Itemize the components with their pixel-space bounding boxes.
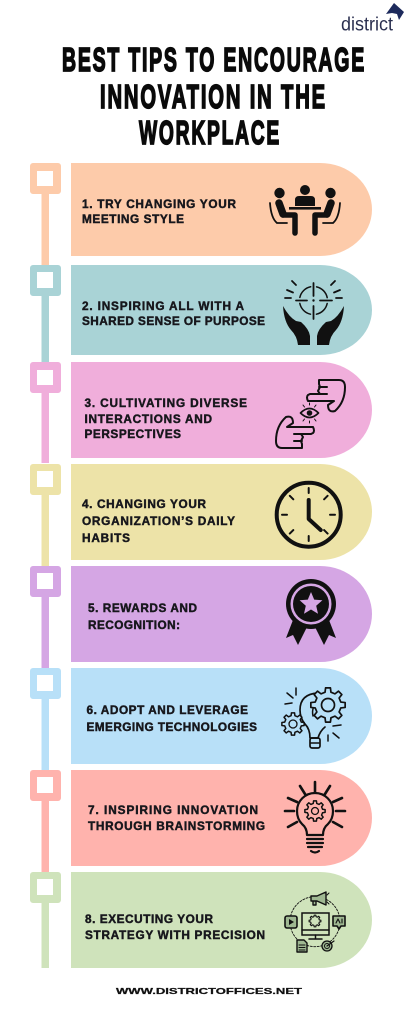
text 8 bbox=[85, 912, 265, 942]
icon: light bulb with gear bbox=[285, 782, 345, 852]
timeline node 6 bbox=[30, 668, 61, 770]
card 6 bbox=[71, 668, 372, 764]
tip 3 bbox=[30, 362, 372, 463]
footer url: WWW.DISTRICTOFFICES.NET bbox=[116, 986, 303, 996]
text 6: EMERGING TECHNOLOGIES bbox=[86, 720, 257, 734]
text 1 bbox=[82, 197, 236, 226]
timeline node 8 bbox=[30, 872, 61, 968]
icon: meeting bbox=[270, 185, 340, 233]
card 7 bbox=[71, 770, 372, 866]
text 2: SHARED SENSE OF PURPOSE bbox=[82, 314, 265, 328]
text 7: THROUGH BRAINSTORMING bbox=[88, 819, 265, 833]
card 5 bbox=[71, 566, 372, 662]
text 5: 5. REWARDS AND bbox=[88, 601, 197, 615]
text 6 bbox=[86, 703, 257, 734]
timeline node 5 bbox=[30, 566, 61, 668]
tip 7 bbox=[30, 770, 372, 872]
tip 4 bbox=[30, 464, 372, 566]
text 3: PERSPECTIVES bbox=[84, 427, 181, 441]
tip 6 bbox=[30, 668, 372, 770]
icon: target in hands bbox=[283, 281, 344, 345]
icon: strategy monitor cycle bbox=[285, 892, 345, 952]
text 3: 3. CULTIVATING DIVERSE bbox=[84, 396, 247, 410]
title bbox=[62, 41, 366, 151]
timeline node 3 bbox=[30, 362, 61, 463]
icon: clock bbox=[277, 483, 341, 547]
timeline node 7 bbox=[30, 770, 61, 872]
card 2 bbox=[71, 265, 372, 355]
card 4 bbox=[71, 464, 372, 560]
tip 5 bbox=[30, 566, 372, 668]
icon: hands framing eye bbox=[276, 380, 345, 448]
tip 2 bbox=[30, 265, 372, 362]
text 7 bbox=[88, 803, 265, 833]
text 4 bbox=[82, 497, 235, 545]
text 4: ORGANIZATION’S DAILY bbox=[82, 514, 235, 528]
icon: award ribbon bbox=[286, 579, 336, 645]
text 4: HABITS bbox=[82, 531, 130, 545]
text 5: RECOGNITION: bbox=[88, 618, 180, 632]
text 8: STRATEGY WITH PRECISION bbox=[85, 928, 265, 942]
text 2: 2. INSPIRING ALL WITH A bbox=[82, 299, 244, 313]
title: WORKPLACE bbox=[139, 114, 281, 151]
text 1: 1. TRY CHANGING YOUR bbox=[82, 197, 236, 211]
text 5 bbox=[88, 601, 197, 632]
text 1: MEETING STYLE bbox=[82, 212, 184, 226]
tip 1 bbox=[30, 163, 372, 265]
card 1 bbox=[71, 163, 372, 256]
text 3 bbox=[84, 396, 247, 441]
icon: gears and bulb bbox=[282, 688, 345, 748]
text 6: 6. ADOPT AND LEVERAGE bbox=[86, 703, 248, 717]
text 7: 7. INSPIRING INNOVATION bbox=[88, 803, 258, 817]
text 3: INTERACTIONS AND bbox=[84, 412, 212, 426]
logo: district: district bbox=[341, 14, 394, 36]
text 8: 8. EXECUTING YOUR bbox=[85, 912, 213, 926]
timeline node 4 bbox=[30, 464, 61, 566]
logo: district bbox=[341, 3, 404, 36]
card 8 bbox=[71, 872, 372, 968]
tip 8 bbox=[30, 872, 372, 968]
text 2 bbox=[82, 299, 265, 328]
text 4: 4. CHANGING YOUR bbox=[82, 497, 206, 511]
timeline node 2 bbox=[30, 265, 61, 362]
card 3 bbox=[71, 362, 372, 458]
timeline node 1 bbox=[30, 163, 61, 265]
